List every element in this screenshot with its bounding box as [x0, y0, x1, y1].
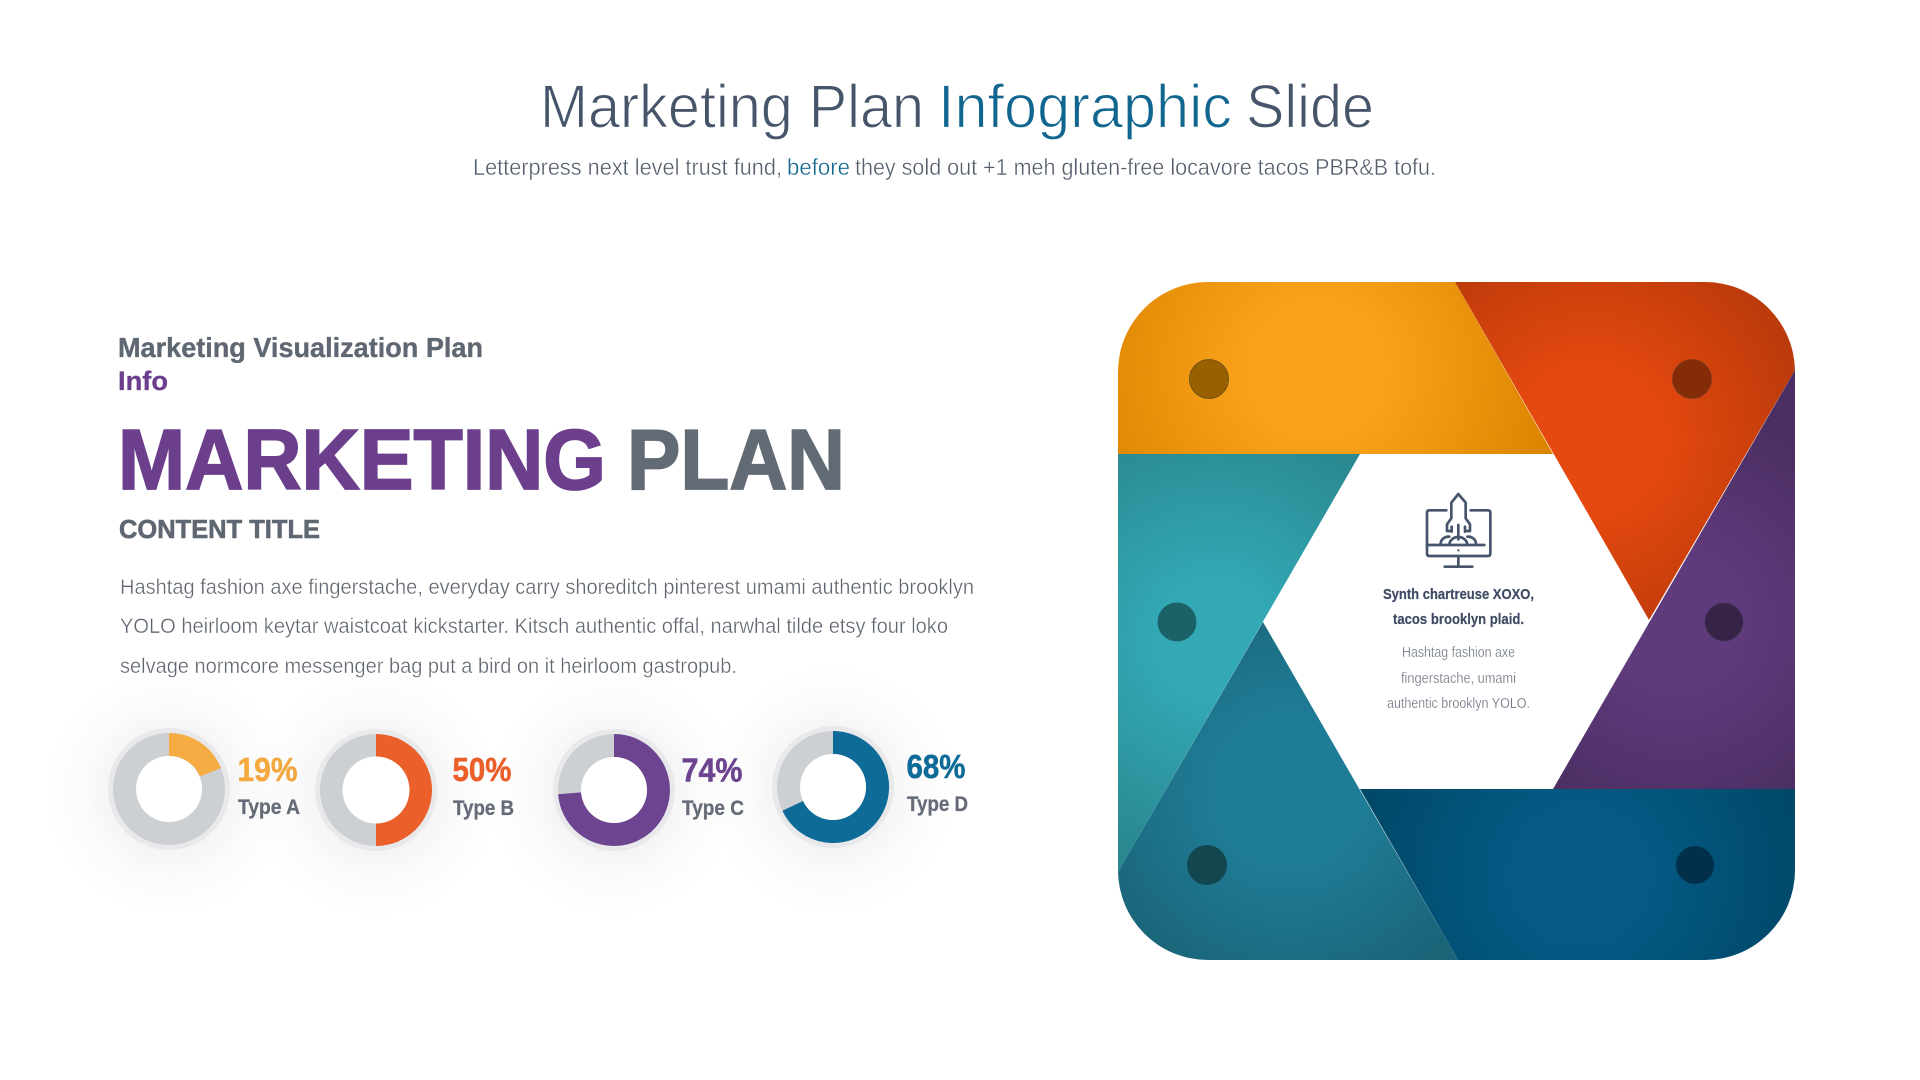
label: type B value: 50% — [452, 751, 512, 788]
label: type A value — [238, 751, 300, 819]
subtitle: Letterpress next level trust fund, — [473, 154, 782, 180]
donut chart: type D — [708, 665, 958, 915]
segment: blue — [1360, 789, 1795, 960]
label: type C value: Type C — [682, 797, 744, 820]
center text — [1387, 645, 1530, 712]
dot: light teal — [1158, 602, 1196, 642]
segment: red — [1455, 282, 1795, 620]
panel: hexagon diagram — [1118, 282, 1795, 960]
body paragraph — [120, 576, 974, 678]
subtitle — [473, 154, 1436, 180]
segment: purple — [1553, 370, 1795, 789]
dot: orange — [1190, 360, 1228, 398]
donut chart: type B — [251, 668, 501, 918]
center text: authentic brooklyn YOLO. — [1387, 696, 1530, 712]
body paragraph: YOLO heirloom keytar waistcoat kickstarter. Kitsch authentic offal, narwhal tilde etsy four loko — [120, 615, 948, 638]
title — [540, 72, 1374, 140]
body paragraph: selvage normcore messenger bag put a bird on it heirloom gastropub. — [120, 655, 737, 678]
center text: fingerstache, umami — [1401, 671, 1516, 687]
heading: marketing visualization plan: Marketing Visualization Plan — [118, 332, 483, 363]
subtitle: before — [787, 154, 850, 180]
segment: dark teal — [1118, 622, 1458, 960]
label: type C value: 74% — [682, 752, 742, 788]
title: Infographic — [938, 72, 1232, 140]
label: type C value — [682, 752, 744, 820]
label: type A value: Type A — [238, 796, 300, 819]
center heading: Synth chartreuse XOXO, — [1383, 586, 1534, 603]
label: type B value: Type B — [453, 797, 514, 820]
center heading: tacos brooklyn plaid. — [1393, 611, 1524, 628]
center heading — [1383, 586, 1534, 628]
label: type B value — [452, 751, 514, 820]
label: type A value: 19% — [238, 751, 298, 788]
segment: light teal — [1118, 454, 1360, 872]
headline: marketing plan: PLAN — [627, 413, 845, 508]
center text: Hashtag fashion axe — [1402, 645, 1515, 661]
dot: purple — [1705, 603, 1743, 641]
dot: dark teal — [1187, 845, 1227, 885]
heading: info: Info — [118, 366, 168, 396]
donut chart: type A — [44, 667, 294, 917]
label: type D value: Type D — [907, 793, 968, 816]
subtitle: they sold out +1 meh gluten-free locavore tacos PBR&B tofu. — [855, 154, 1436, 180]
body paragraph: Hashtag fashion axe fingerstache, everyday carry shoreditch pinterest umami authentic brooklyn — [120, 576, 974, 599]
icon: rocket launching from monitor — [1427, 494, 1490, 567]
content title: CONTENT TITLE — [119, 514, 320, 544]
title: Slide — [1246, 72, 1374, 140]
label: type D value: 68% — [906, 748, 966, 785]
headline: marketing plan: MARKETING — [118, 413, 606, 508]
label: type D value — [906, 748, 968, 816]
dot: red — [1672, 360, 1712, 398]
dot: blue — [1676, 846, 1714, 884]
donut chart: type C — [489, 668, 739, 918]
segment: orange — [1118, 282, 1553, 454]
title: Marketing Plan — [540, 72, 924, 140]
